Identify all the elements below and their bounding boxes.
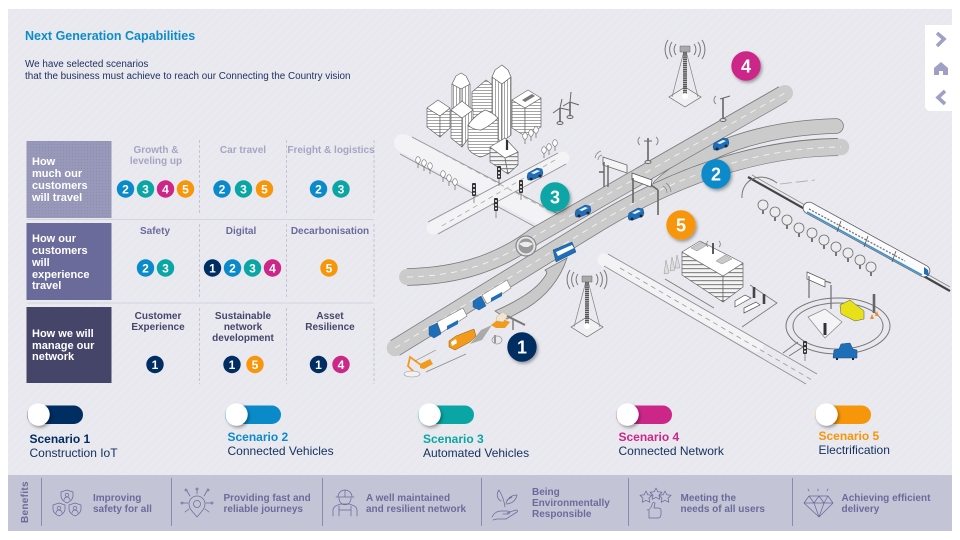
- row heading: how our customers will experience travel: will: [31, 257, 50, 269]
- cell: digital: [204, 226, 281, 277]
- marker 2: 2: [711, 164, 721, 184]
- row heading: how we will manage our network: network: [32, 351, 75, 363]
- cell: safety: Safety: [140, 226, 170, 237]
- cell: customer experience: 1: [152, 358, 159, 372]
- small roadside masts: [638, 96, 730, 164]
- cell: customer experience: [131, 311, 185, 373]
- scenario 3 toggle: [418, 403, 529, 460]
- benefit text: environment: Responsible: [532, 509, 592, 520]
- marker 2: [701, 159, 731, 189]
- row heading: how our customers will experience travel: customers: [32, 245, 88, 257]
- cell: freight and logistics: [287, 145, 375, 198]
- tall central tower: [492, 65, 511, 142]
- benefit text: journeys: Providing fast and: [224, 493, 311, 504]
- cell: sustainable network development: 5: [252, 358, 259, 372]
- cell: growth and leveling up: 2: [122, 182, 129, 196]
- marker 3: 3: [550, 188, 560, 208]
- marker 5: 5: [676, 216, 686, 236]
- marker 1: [507, 332, 537, 362]
- scenario 5 toggle: Scenario 5: [818, 429, 880, 443]
- cell: decarbonisation: 5: [326, 261, 333, 275]
- cell: sustainable network development: development: [212, 333, 275, 344]
- benefit text: journeys: reliable journeys: [224, 504, 303, 515]
- row heading: how our customers will experience travel: [26, 223, 112, 300]
- cell: asset resilience: Resilience: [305, 322, 355, 333]
- cell: freight and logistics: Freight & logistics: [287, 145, 375, 156]
- autonomous test track: [783, 272, 890, 361]
- benefit text: environment: Environmentally: [532, 498, 610, 509]
- benefit text: safety: safety for all: [93, 504, 152, 515]
- cell: sustainable network development: 1: [229, 358, 236, 372]
- intro text: We have selected scenarios: [25, 59, 148, 70]
- benefits label: Benefits: [20, 481, 31, 523]
- road vehicles: [527, 138, 729, 262]
- title: Next Generation Capabilities: [25, 29, 195, 43]
- matrix dividers: [27, 140, 374, 384]
- navigation tab: [925, 25, 952, 111]
- back left tower: [452, 73, 470, 118]
- marker 1: 1: [517, 338, 527, 358]
- benefit text: network: A well maintained: [366, 493, 450, 504]
- cell: safety: 2: [142, 261, 149, 275]
- scenario 3 toggle: Scenario 3: [423, 432, 484, 446]
- cell: car travel: 3: [240, 182, 247, 196]
- icon: worker: [333, 490, 357, 516]
- rounded block: [468, 110, 498, 157]
- communication towers: [567, 40, 705, 337]
- row heading: how our customers will experience travel: How our: [32, 233, 77, 245]
- cell: sustainable network development: [212, 311, 275, 373]
- cell: customer experience: Experience: [131, 322, 185, 333]
- capability matrix: [26, 140, 375, 384]
- row heading: how much our customers will travel: How: [32, 156, 56, 168]
- cell: sustainable network development: Sustainable: [215, 311, 271, 322]
- cell: growth and leveling up: 4: [162, 182, 169, 196]
- row heading: how much our customers will travel: [26, 141, 112, 218]
- benefits bar: [8, 475, 952, 531]
- cell: customer experience: Customer: [135, 311, 181, 322]
- city streets: [400, 137, 566, 234]
- city traffic lights: [472, 166, 523, 218]
- service road lower right: [604, 254, 817, 384]
- intro text: [25, 59, 351, 82]
- row heading: how we will manage our network: [26, 307, 112, 383]
- scenario 2 toggle: Scenario 2: [228, 430, 289, 444]
- cell: growth and leveling up: Growth &: [134, 145, 178, 156]
- cell: digital: Digital: [226, 226, 256, 237]
- cell: decarbonisation: Decarbonisation: [291, 226, 369, 237]
- steering wheel icon: [516, 236, 536, 256]
- marker 5: [666, 210, 696, 240]
- wind turbines: [553, 92, 579, 124]
- scenario 4 toggle: [616, 403, 725, 458]
- scenario 2 toggle: Connected Vehicles: [228, 444, 334, 458]
- front left block: [427, 100, 450, 137]
- street trees: [416, 127, 557, 190]
- cell: sustainable network development: network: [224, 322, 263, 333]
- right office block: [512, 90, 541, 136]
- cell: decarbonisation: [291, 226, 369, 277]
- row of trees by the railway: [758, 200, 876, 276]
- solar roof office building: [664, 241, 777, 327]
- cell: digital: 2: [229, 261, 236, 275]
- row heading: how we will manage our network: How we will: [32, 328, 94, 340]
- benefit dividers: [42, 478, 792, 526]
- scenario 5 toggle: [815, 403, 890, 457]
- marker 3: [540, 182, 570, 212]
- icon: back chevron: [938, 91, 945, 104]
- row heading: how our customers will experience travel: travel: [32, 280, 61, 292]
- intro text: that the business must achieve to reach our Connecting the Country vision: [25, 71, 351, 82]
- icon: stars and thumbs up: [640, 488, 671, 518]
- row heading: how much our customers will travel: customers: [32, 180, 88, 192]
- benefit text: delivery: delivery: [842, 504, 880, 515]
- scenario 1 toggle: [27, 403, 118, 460]
- benefit text: users: Meeting the: [680, 493, 736, 504]
- scenario 5 toggle: Electrification: [818, 443, 890, 457]
- high speed train: [807, 208, 929, 276]
- row heading: how we will manage our network: manage our: [32, 340, 95, 352]
- scenario 2 toggle: [225, 403, 334, 458]
- railway line and tunnel: [742, 175, 950, 291]
- cell: car travel: Car travel: [220, 145, 266, 156]
- row heading: how much our customers will travel: much our: [32, 168, 83, 180]
- cell: freight and logistics: 2: [315, 182, 322, 196]
- cell: growth and leveling up: leveling up: [130, 156, 182, 167]
- cell: car travel: 2: [219, 182, 226, 196]
- cell: digital: 4: [269, 261, 276, 275]
- marker 4: 4: [741, 56, 751, 76]
- benefit text: environment: Being: [532, 487, 560, 498]
- scenario 1 toggle: Construction IoT: [30, 446, 118, 460]
- row heading: how our customers will experience travel: experience: [32, 269, 89, 281]
- freight lorries: [429, 280, 511, 338]
- benefit text: users: needs of all users: [680, 504, 765, 515]
- scenario 4 toggle: Connected Network: [618, 444, 725, 458]
- row heading: how much our customers will travel: will travel: [31, 192, 82, 204]
- cell: growth and leveling up: 5: [182, 182, 189, 196]
- cell: digital: 1: [209, 261, 216, 275]
- icon: diamond: [804, 489, 833, 517]
- icon: next chevron: [937, 33, 944, 46]
- motorway roads: [395, 93, 841, 348]
- icon: hand and plant: [492, 490, 518, 520]
- icon: journey pin: [181, 488, 213, 517]
- city buildings: [427, 65, 541, 174]
- icon: safety shields: [53, 490, 81, 516]
- back middle block: [472, 80, 494, 125]
- cell: growth and leveling up: [117, 145, 194, 198]
- benefit text: network: and resilient network: [366, 504, 466, 515]
- construction zone vehicles: [404, 312, 525, 377]
- cell: asset resilience: 1: [315, 358, 322, 372]
- cell: freight and logistics: 3: [338, 182, 345, 196]
- small striped building: [490, 138, 518, 174]
- cell: asset resilience: [305, 311, 355, 373]
- gantries and signs: [595, 151, 671, 215]
- cell: asset resilience: 4: [338, 358, 345, 372]
- benefit text: delivery: Achieving efficient: [842, 493, 931, 504]
- benefit text: safety: Improving: [93, 493, 141, 504]
- isometric map illustration: [395, 40, 950, 384]
- scenario 4 toggle: Scenario 4: [618, 430, 680, 444]
- cell: growth and leveling up: 3: [142, 182, 149, 196]
- scenario 1 toggle: Scenario 1: [30, 432, 91, 446]
- cell: asset resilience: Asset: [316, 311, 344, 322]
- cell: car travel: 5: [261, 182, 268, 196]
- scenario 3 toggle: Automated Vehicles: [423, 446, 529, 460]
- cell: safety: [137, 226, 174, 277]
- front middle block: [451, 101, 473, 147]
- icon: home: [934, 62, 948, 75]
- marker 4: [731, 51, 761, 81]
- cell: digital: 3: [249, 261, 256, 275]
- cell: safety: 3: [162, 261, 169, 275]
- cell: car travel: [213, 145, 273, 198]
